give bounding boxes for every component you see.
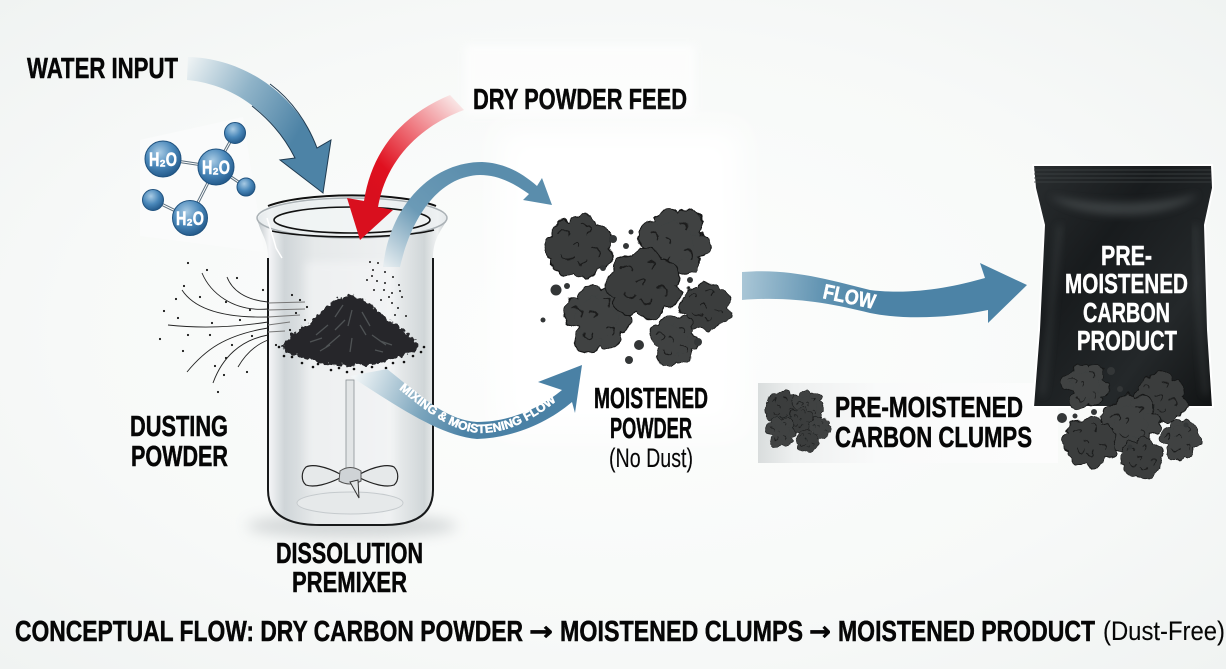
- arrow: mixing and moistening flow: [359, 365, 582, 439]
- soft white patch behind moistened powder: [500, 130, 740, 430]
- arrow: flow: [742, 263, 1027, 323]
- caption: conceptual flow: →: [529, 617, 553, 647]
- impeller: [302, 380, 398, 498]
- label: dissolution premixer: DISSOLUTION: [276, 538, 423, 570]
- panel: water molecule diagram: [140, 117, 264, 252]
- label: dusting powder: POWDER: [131, 441, 228, 473]
- label: dusting powder: DUSTING: [130, 411, 228, 443]
- bag label: PRE-: [1101, 240, 1152, 271]
- arrow: water input: [187, 57, 331, 193]
- label: moistened powder: POWDER: [610, 413, 692, 445]
- product bag: [1033, 165, 1213, 407]
- bag label: [1065, 240, 1188, 356]
- panel: water molecule diagram: H₂O: [176, 209, 204, 230]
- label: moistened powder: [594, 383, 708, 473]
- arrow: dusty exit over the beaker: [383, 162, 552, 267]
- caption: conceptual flow: [15, 616, 1225, 648]
- panel: clumps legend: CARBON CLUMPS: [835, 422, 1032, 454]
- caption: conceptual flow: →: [809, 617, 831, 647]
- panel: clumps legend: PRE-MOISTENED: [835, 392, 1023, 424]
- product bag clumps: [1057, 363, 1202, 479]
- dusting particles and lines: [160, 263, 307, 392]
- caption: conceptual flow: MOISTENED CLUMPS: [560, 616, 803, 648]
- title: dry powder feed: DRY POWDER FEED: [473, 84, 687, 116]
- panel: water molecule diagram: H₂O: [202, 158, 230, 179]
- caption: conceptual flow: CONCEPTUAL FLOW: DRY CARBON POWDER: [15, 616, 523, 648]
- moistened powder clumps: [540, 208, 731, 366]
- arrow: flow: FLOW: [821, 280, 878, 314]
- panel: water molecule diagram: H₂O: [149, 150, 177, 171]
- arrow: dry powder feed: [347, 95, 464, 240]
- label: dissolution premixer: [276, 538, 423, 599]
- title: dry powder feed: [465, 45, 695, 116]
- bag label: CARBON: [1083, 297, 1170, 328]
- panel: clumps legend: [758, 383, 1058, 463]
- arrow: mixing and moistening flow: MIXING & MOISTENING FLOW: [399, 382, 555, 434]
- bag label: PRODUCT: [1077, 325, 1177, 356]
- label: dissolution premixer: PREMIXER: [292, 567, 407, 599]
- caption: conceptual flow: MOISTENED PRODUCT: [838, 616, 1095, 648]
- beaker: dissolution premixer: [247, 195, 457, 538]
- label: dusting powder: [130, 411, 228, 473]
- label: moistened powder: MOISTENED: [594, 383, 708, 415]
- label: moistened powder: (No Dust): [609, 443, 693, 473]
- title: water input: WATER INPUT: [27, 53, 178, 85]
- powder pile: [279, 262, 424, 372]
